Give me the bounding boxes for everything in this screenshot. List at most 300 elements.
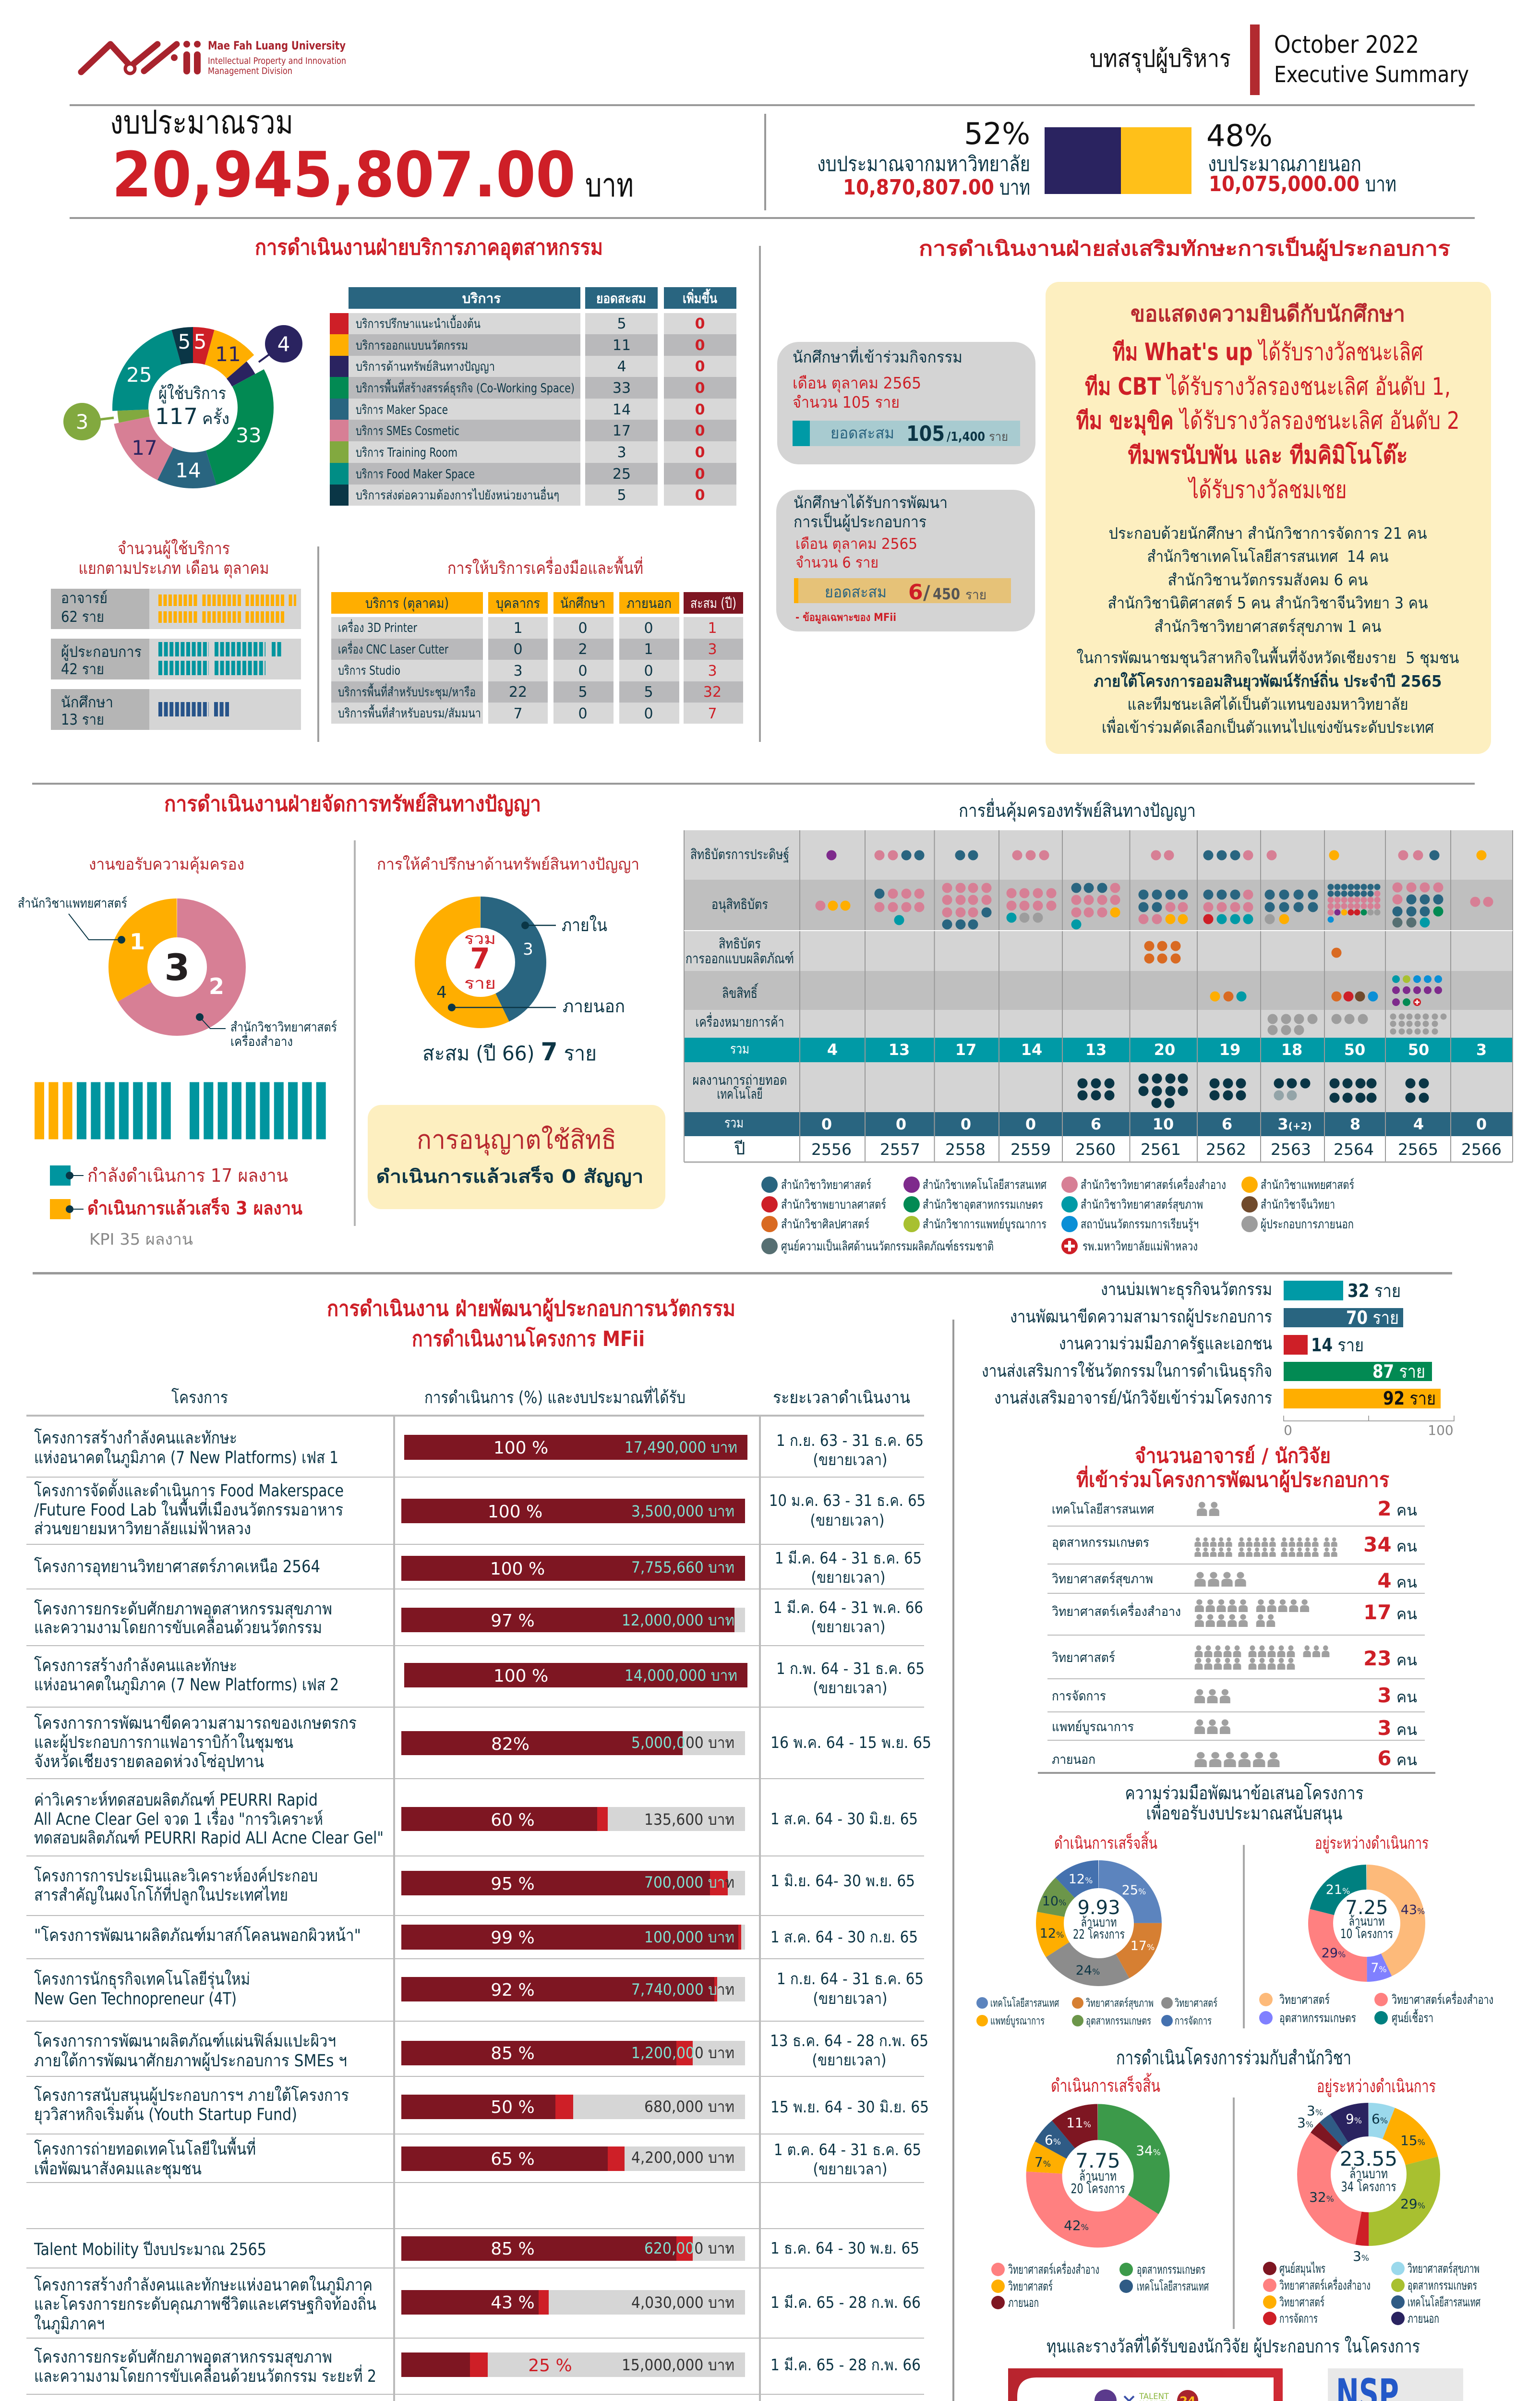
project row 2 [34,1478,926,1539]
table: tools and space: 32 [703,684,722,701]
project row 11: 13 ธ.ค. 64 - 28 ก.พ. 65 [770,2031,928,2050]
project row 16 [34,2347,921,2386]
panel: researchers pictogram: 4 คน [1377,1569,1417,1592]
total budget: 20,945,807.00 [112,138,576,211]
project row 5: 14,000,000 บาท [625,1666,737,1685]
donut: service users 117: 25 [126,363,152,387]
project row 6: และผู้ประกอบการกาแฟอาราบิก้าในชุมชน [34,1733,293,1752]
panel: congratulations callout: เพื่อเข้าร่วมคัดเลือกเป็นตัวแทนไปแข่งขันระดับประเทศ [1102,716,1434,737]
panel: IP works tick chart: KPI 35 ผลงาน [89,1230,193,1249]
table: tools and space: 0 [513,641,523,658]
table: services [330,287,736,506]
donut: proposals in progress 7.25: 7.25 [1345,1897,1388,1919]
donut: proposals completed 9.93: ดำเนินการเสร็จสิ้น [1054,1831,1157,1853]
panel: students in activities: 105 [906,422,945,446]
legend: faculties: สถาบันนวัตกรรมการเรียนรู้ฯ [1081,1217,1199,1232]
panel: IP works tick chart [35,1111,326,1249]
table: tools and space [331,556,743,724]
project row 2: 3,500,000 บาท [631,1502,734,1520]
project row 6: 16 พ.ค. 64 - 15 พ.ย. 65 [770,1733,931,1752]
table: tools and space: สะสม (ปี) [690,595,736,611]
donut: joint completed 7.75: วิทยาศาสตร์ [1008,2280,1053,2294]
table: services: 11 [613,337,631,354]
project row 6: โครงการการพัฒนาขีดความสามารถของเกษตรกร [34,1713,357,1733]
panel: IP protection requests donut: สำนักวิชาวิทยาศาสตร์ [230,1019,337,1035]
donut: joint completed 7.75 [991,2073,1209,2310]
donut: joint in progress 23.55: 32% [1309,2189,1334,2205]
donut: joint completed 7.75: 7.75 [1075,2149,1120,2172]
donut: proposals completed 9.93 [976,1831,1217,2027]
table: services: บริการ Food Maker Space [356,467,475,482]
panel: congratulations callout: สำนักวิชาเทคโนโลยีสารสนเทศ 14 คน [1147,547,1388,566]
table: services: 0 [695,444,705,461]
heading: grants and awards: ทุนและรางวัลที่ได้รับของนักวิจัย ผู้ประกอบการ ในโครงการ [1047,2334,1420,2357]
table: services: 0 [695,423,705,439]
project row 9: 99 % [491,1928,535,1948]
heading: proposal cooperation: ความร่วมมือพัฒนาข้อเสนอโครงการ [1125,1783,1363,1804]
donut: proposals completed 9.93: อุตสาหกรรมเกษตร [1086,2015,1151,2027]
panel: congratulations callout: ทีม ขะมุขิค ได้รับรางวัลรองชนะเลิศ อันดับ 2 [1076,407,1459,436]
project row 4: 97 % [491,1611,535,1631]
table: IP filings matrix: 2558 [945,1140,986,1159]
table: IP filings matrix: 6 [1222,1115,1232,1133]
donut: joint in progress 23.55: วิทยาศาสตร์เครื่องสำอาง [1279,2277,1371,2293]
donut: service users 117: 3 [76,410,88,434]
table: IP filings matrix: 3(+2) [1277,1115,1312,1133]
table: IP filings matrix: 4 [827,1041,838,1059]
bar chart: companies by work area: 0 [1284,1422,1292,1438]
panel: IP consulting donut: 3 [523,940,533,959]
bar chart: companies by work area: งานบ่มเพาะธุรกิจนวัตกรรม [1101,1280,1272,1300]
project row 10: 7,740,000 บาท [631,1980,734,1999]
table: tools and space: 3 [513,663,523,679]
budget split: งบประมาณภายนอก [1208,152,1361,176]
project row 11 [34,2031,928,2071]
donut: joint in progress 23.55: 23.55 [1340,2147,1397,2171]
table: IP filings matrix: 2556 [811,1140,852,1159]
panel: IP protection requests donut: เครื่องสำอาง [230,1032,293,1049]
project row 6: 82% [491,1734,529,1754]
bar chart: companies by work area: 100 [1428,1422,1454,1438]
project row 4: (ขยายเวลา) [811,1617,885,1636]
donut: joint completed 7.75: 6% [1045,2132,1061,2148]
panel: researchers pictogram [1038,1444,1435,1774]
table: services: 0 [695,401,705,418]
budget split [817,116,1396,200]
project row 6: จังหวัดเชียงรายตลอดห่วงโซ่อุปทาน [34,1752,264,1771]
table: IP filings matrix: 17 [955,1041,976,1059]
table: tools and space: 7 [708,705,717,722]
table: tools and space: 0 [644,705,653,722]
table: tools and space: ภายนอก [626,595,672,611]
table: services: 4 [617,358,626,375]
project row 10: 1 ก.ย. 64 - 31 ธ.ค. 65 [777,1969,924,1988]
table: IP filings matrix: อนุสิทธิบัตร [711,896,768,913]
donut: joint in progress 23.55 [1263,2076,1480,2326]
project row 15: โครงการสร้างกำลังคนและทักษะแห่งอนาคตในภูมิภาค [34,2275,373,2295]
project row 4: โครงการยกระดับศักยภาพอุตสาหกรรมสุขภาพ [34,1599,332,1619]
project row 2: โครงการจัดตั้งและดำเนินการ Food Makerspace [34,1478,344,1501]
panel: IP protection requests donut: 2 [209,973,224,999]
legend: faculties: สำนักวิชาศิลปศาสตร์ [781,1217,869,1232]
project row 5: 1 ก.พ. 64 - 31 ธ.ค. 65 [776,1659,925,1678]
heading: innovation entrepreneurs [327,1297,735,1351]
table: tools and space: 7 [513,705,523,722]
donut: joint in progress 23.55: 3% [1297,2115,1313,2131]
heading: industry services: การดำเนินงานฝ่ายบริการภาคอุตสาหกรรม [255,235,603,261]
project row 13 [34,2136,921,2179]
table: IP filings matrix: สิทธิบัตรการประดิษฐ์ [690,846,789,863]
table: IP filings matrix: 2557 [880,1140,920,1159]
donut: proposals in progress 7.25: ล้านบาท [1349,1914,1384,1929]
project row 14 [34,2236,919,2261]
header logo: MFii: Management Division [208,66,292,76]
donut: joint completed 7.75: วิทยาศาสตร์เครื่องสำอาง [1008,2261,1099,2277]
budget split: 10,870,807.00 [843,175,994,200]
donut: proposals completed 9.93: 12% [1040,1926,1064,1941]
budget split: 48% [1206,118,1273,153]
project row 15 [34,2275,921,2334]
project row 10: โครงการนักธุรกิจเทคโนโลยีรุ่นใหม่ [34,1969,250,1989]
legend: faculties: สำนักวิชาพยาบาลศาสตร์ [781,1198,886,1212]
donut: service users 117: 17 [132,436,157,460]
donut: joint completed 7.75: 7% [1035,2154,1051,2170]
table: services: บริการส่งต่อความต้องการไปยังหน่วยงานอื่นๆ [356,486,559,503]
header title: Executive Summary [1274,61,1469,87]
table: IP filings matrix: 50 [1344,1041,1365,1059]
panel: researchers pictogram: ภายนอก [1052,1752,1095,1767]
budget split: บาท [1365,172,1396,196]
donut: proposals completed 9.93: วิทยาศาสตร์ [1175,1997,1217,2010]
table header: projects: โครงการ [171,1388,228,1407]
table: tools and space: บริการพื้นที่สำหรับประชุม/หารือ [338,683,476,700]
bar chart: companies by work area: 92 ราย [1383,1388,1436,1409]
donut: service users 117: 14 [175,459,201,482]
bar chart: companies by work area: งานส่งเสริมอาจารย์/นักวิจัยเข้าร่วมโครงการ [994,1388,1272,1408]
donut: service users 117 [63,325,302,482]
panel: researchers pictogram: 2 คน [1377,1497,1417,1520]
project row 16: และความงามโดยการขับเคลื่อนด้วยนวัตกรรม ระยะที่ 2 [34,2365,376,2386]
donut: joint completed 7.75: ดำเนินการเสร็จสิ้น [1051,2073,1160,2096]
table: tools and space: 0 [578,705,588,722]
panel: congratulations callout: ประกอบด้วยนักศึกษา สำนักวิชาการจัดการ 21 คน [1109,524,1427,543]
panel: users by type: ผู้ประกอบการ [61,643,142,661]
donut: service users 117: 33 [236,424,262,447]
project row 12: 15 พ.ย. 64 - 30 มิ.ย. 65 [770,2098,929,2116]
panel: congratulations callout: ได้รับรางวัลชมเชย [1187,476,1347,504]
donut: proposals in progress 7.25: ศูนย์เชื้อรา [1392,2009,1433,2025]
project row 2: 100 % [488,1502,542,1522]
header logo: MFii: Intellectual Property and Innovation [208,56,346,66]
project row 1: 17,490,000 บาท [625,1438,737,1456]
table: tools and space: บุคลากร [496,595,540,612]
legend: faculties: ศูนย์ความเป็นเลิศด้านนวัตกรรมผลิตภัณฑ์ธรรมชาติ [781,1238,994,1254]
table: services: 25 [613,466,631,483]
panel: congratulations callout: สำนักวิชานวัตกรรมสังคม 6 คน [1167,570,1368,589]
heading: IP management: การดำเนินงานฝ่ายจัดการทรัพย์สินทางปัญญา [164,792,541,816]
table: IP filings matrix: 0 [896,1115,906,1133]
panel: researchers pictogram: อุตสาหกรรมเกษตร [1052,1535,1149,1551]
legend: faculties: รพ.มหาวิทยาลัยแม่ฟ้าหลวง [1083,1239,1198,1254]
donut: joint in progress 23.55: เทคโนโลยีสารสนเทศ [1408,2295,1480,2310]
donut: joint in progress 23.55: 3% [1353,2248,1369,2264]
donut: proposals completed 9.93: 22 โครงการ [1073,1927,1125,1942]
panel: IP consulting donut: การให้คำปรึกษาด้านทรัพย์สินทางปัญญา [377,855,639,873]
project row 16: โครงการยกระดับศักยภาพอุตสาหกรรมสุขภาพ [34,2347,332,2367]
project row 8: โครงการการประเมินและวิเคราะห์องค์ประกอบ [34,1866,318,1886]
donut: joint in progress 23.55: ศูนย์สมุนไพร [1279,2261,1325,2276]
table: services: 0 [695,466,705,483]
donut: joint in progress 23.55: ภายนอก [1408,2312,1439,2326]
panel: IP protection requests donut: 1 [130,929,145,955]
table: tools and space: 0 [644,620,653,637]
donut: joint in progress 23.55: 29% [1400,2196,1425,2212]
donut: joint completed 7.75: ภายนอก [1008,2296,1039,2310]
project row 2: (ขยายเวลา) [810,1511,884,1529]
legend: faculties: สำนักวิชาอุตสาหกรรมเกษตร [923,1198,1043,1212]
donut: proposals in progress 7.25: 43% [1401,1903,1425,1917]
project row 6 [34,1713,931,1771]
project row 15: 43 % [491,2293,535,2313]
project row 2: /Future Food Lab ในพื้นที่เมืองนวัตกรรมอาหาร [34,1497,343,1520]
table: services: 0 [695,315,705,332]
table: tools and space: 1 [644,641,653,658]
table: IP filings matrix: 3 [1476,1041,1487,1059]
project row 16: 15,000,000 บาท [622,2356,734,2374]
panel: IP consulting donut: สะสม (ปี 66) 7 ราย [422,1038,597,1067]
project row 15: ในภูมิภาคฯ [34,2314,105,2334]
donut: joint completed 7.75: 11% [1066,2115,1091,2131]
budget split: 52% [964,116,1030,151]
panel: researchers pictogram: จำนวนอาจารย์ / นักวิจัย [1135,1444,1331,1467]
project row 1: 1 ก.ย. 63 - 31 ธ.ค. 65 [776,1431,924,1450]
table: IP filings matrix: 20 [1154,1041,1175,1059]
panel: congratulations callout: สำนักวิชาวิทยาศาสตร์สุขภาพ 1 คน [1154,617,1382,636]
project row 12: 680,000 บาท [644,2098,734,2116]
panel: researchers pictogram: ที่เข้าร่วมโครงการพัฒนาผู้ประกอบการ [1076,1466,1389,1492]
bar chart: companies by work area: งานพัฒนาขีดความสามารถผู้ประกอบการ [1010,1307,1272,1327]
table header: projects: การดำเนินการ (%) และงบประมาณที่ได้รับ [424,1386,686,1407]
panel: students in activities: นักศึกษาที่เข้าร่วมกิจกรรม [793,346,962,366]
legend: faculties: สำนักวิชาเทคโนโลยีสารสนเทศ [923,1177,1047,1192]
project row 5: 100 % [493,1666,548,1686]
table header: projects: ระยะเวลาดำเนินงาน [773,1388,910,1407]
panel: students developed: การเป็นผู้ประกอบการ [794,512,926,532]
panel: IP protection requests donut: 3 [165,946,190,989]
project row 9: 1 ส.ค. 64 - 30 ก.ย. 65 [770,1928,918,1946]
table: IP filings matrix: 2561 [1141,1140,1181,1159]
panel: congratulations callout: ขอแสดงความยินดีกับนักศึกษา [1131,301,1405,327]
callout: licensing [368,1105,665,1209]
legend: faculties: สำนักวิชาวิทยาศาสตร์ [781,1178,871,1192]
table: IP filings matrix: เครื่องหมายการค้า [695,1012,784,1030]
project row 12: โครงการสนับสนุนผู้ประกอบการฯ ภายใต้โครงการ [34,2086,349,2105]
project row 13: 4,200,000 บาท [631,2148,734,2167]
panel: researchers pictogram: 3 คน [1377,1716,1417,1740]
project row 7: ค่าวิเคราะห์ทดสอบผลิตภัณฑ์ PEURRI Rapid [34,1791,318,1810]
table: services: ยอดสะสม [596,291,646,306]
table: IP filings matrix: 2563 [1271,1140,1311,1159]
donut: service users 117: ผู้ใช้บริการ [158,384,226,403]
project row 12 [34,2086,929,2124]
table: IP filings matrix: ลิขสิทธิ์ [722,983,758,1001]
table: tools and space: เครื่อง CNC Laser Cutter [338,641,448,657]
project row 11: ภายใต้การพัฒนาศักยภาพผู้ประกอบการ SMEs ฯ [34,2051,347,2071]
budget split: บาท [999,176,1030,200]
donut: proposals completed 9.93: 10% [1042,1894,1066,1909]
table: services: 5 [617,487,626,504]
header title: October 2022 [1274,31,1419,59]
panel: users by type: 62 ราย [61,608,104,626]
project row 2: 10 ม.ค. 63 - 31 ธ.ค. 65 [769,1491,926,1510]
panel: students developed: ยอดสะสม [825,582,887,601]
project row 3: 7,755,660 บาท [631,1558,734,1576]
project row 14: Talent Mobility ปีงบประมาณ 2565 [34,2240,266,2259]
legend: faculties [761,1176,1354,1254]
table: IP filings matrix: 0 [1025,1115,1036,1133]
callout: licensing: การอนุญาตใช้สิทธิ [417,1125,616,1156]
project row 7 [34,1791,918,1848]
panel: users by type: นักศึกษา [61,694,113,711]
project row 1: (ขยายเวลา) [813,1450,887,1469]
panel: researchers pictogram: วิทยาศาสตร์เครื่องสำอาง [1052,1602,1181,1619]
donut: joint in progress 23.55: อุตสาหกรรมเกษตร [1408,2279,1477,2293]
table: IP filings matrix: รวม [724,1115,744,1131]
donut: joint in progress 23.55: การจัดการ [1279,2312,1318,2326]
project row 8: 1 มิ.ย. 64- 30 พ.ย. 65 [770,1871,915,1890]
heading: proposal cooperation: เพื่อขอรับงบประมาณสนับสนุน [1146,1801,1343,1824]
panel: IP protection requests donut [18,855,337,1049]
donut: joint in progress 23.55: 3% [1307,2103,1323,2119]
panel: users by type: 42 ราย [61,661,104,678]
project row 14: 1 ธ.ค. 64 - 30 พ.ย. 65 [770,2239,919,2257]
donut: service users 117: 4 [277,332,290,356]
table: IP filings matrix: รวม [730,1041,749,1057]
project row 7: 135,600 บาท [644,1810,734,1829]
project row 5: แห่งอนาคตในภูมิภาค (7 New Platforms) เฟส 2 [34,1675,339,1695]
donut: joint completed 7.75: 42% [1064,2218,1089,2233]
project row 3: 100 % [490,1559,545,1579]
panel: students in activities: เดือน ตุลาคม 2565 [793,374,921,393]
table: services: 17 [613,423,631,439]
table: IP filings matrix: 2565 [1398,1140,1438,1159]
table: tools and space: บริการ (ตุลาคม) [365,595,449,612]
heading: joint projects with schools: การดำเนินโครงการร่วมกับสำนักวิชา [1116,2047,1351,2069]
panel: students in activities: /1,400 [947,430,985,444]
table: services: บริการปรึกษาแนะนำเบื้องต้น [356,315,481,331]
donut: proposals completed 9.93: 9.93 [1077,1897,1120,1919]
panel: students developed: จำนวน 6 ราย [795,554,878,571]
panel: students developed [776,490,1035,631]
donut: proposals in progress 7.25: อยู่ระหว่างดำเนินการ [1315,1834,1429,1853]
donut: service users 117: 11 [215,342,241,366]
table: IP filings matrix: 2566 [1461,1140,1502,1159]
donut: joint in progress 23.55: 34 โครงการ [1341,2179,1396,2195]
project row 3: (ขยายเวลา) [811,1568,885,1587]
donut: service users 117: 5 [194,330,206,353]
table: services: 3 [617,444,626,461]
panel: students developed: ราย [965,587,987,603]
total budget: งบประมาณรวม [110,104,293,142]
bar chart: companies by work area [982,1280,1454,1438]
panel: researchers pictogram: 17 คน [1363,1601,1417,1624]
donut: joint completed 7.75: อุตสาหกรรมเกษตร [1137,2263,1205,2277]
panel: congratulations callout: สำนักวิชานิติศาสตร์ 5 คน สำนักวิชาจีนวิทยา 3 คน [1108,594,1428,612]
table: services: บริการพื้นที่สร้างสรรค์ธุรกิจ (Co-Working Space) [356,379,575,396]
table: tools and space: 0 [644,663,653,679]
budget split: 10,075,000.00 [1209,172,1360,196]
table header: projects [171,1386,910,1407]
panel: users by type: 13 ราย [61,711,104,728]
panel: IP consulting donut: 4 [436,983,447,1002]
project row 8: 95 % [491,1874,535,1894]
table: tools and space: 3 [708,641,717,658]
panel: users by type: แยกตามประเภท เดือน ตุลาคม [79,559,269,578]
table: IP filings matrix: 2564 [1334,1140,1374,1159]
panel: users by type: จำนวนผู้ใช้บริการ [118,539,230,558]
donut: proposals in progress 7.25: 10 โครงการ [1340,1927,1393,1941]
table: IP filings matrix: 0 [821,1115,832,1133]
table: services: บริการ [462,291,501,306]
donut: proposals in progress 7.25: 21% [1326,1882,1350,1897]
table: services: บริการ SMEs Cosmetic [356,424,459,438]
table: tools and space: 3 [708,663,717,679]
table: services: 0 [695,337,705,354]
header title: บทสรุปผู้บริหาร [1090,45,1231,73]
table: tools and space: 1 [708,620,717,637]
legend: faculties: สำนักวิชาจีนวิทยา [1261,1198,1335,1212]
table: tools and space: 5 [578,684,588,701]
bar chart: companies by work area: 87 ราย [1372,1361,1425,1382]
legend: faculties: สำนักวิชาวิทยาศาสตร์สุขภาพ [1081,1198,1203,1212]
panel: congratulations callout: ทีม CBT ได้รับรางวัลรองชนะเลิศ อันดับ 1, [1085,373,1451,400]
legend: faculties: ผู้ประกอบการภายนอก [1261,1217,1354,1232]
project row 11: 1,200,000 บาท [631,2044,734,2062]
table: tools and space: 5 [644,684,653,701]
project row 3 [34,1549,922,1587]
panel: users by type: อาจารย์ [61,590,108,607]
donut: proposals in progress 7.25: วิทยาศาสตร์ [1279,1993,1330,2007]
table: tools and space: 1 [513,620,523,637]
panel: students in activities: จำนวน 105 ราย [793,393,900,412]
donut: joint in progress 23.55: วิทยาศาสตร์สุขภาพ [1408,2262,1480,2276]
donut: joint completed 7.75: 20 โครงการ [1071,2181,1125,2196]
project row 11: โครงการการพัฒนาผลิตภัณฑ์แผ่นฟิล์มแปะผิวฯ [34,2031,336,2051]
table: IP filings matrix: 14 [1021,1041,1042,1059]
project row 15: 4,030,000 บาท [631,2293,734,2312]
panel: IP consulting donut: รวม [464,929,496,948]
header logo: MFii: Mae Fah Luang University [208,39,346,52]
panel: congratulations callout: ทีม What's up ได้รับรางวัลชนะเลิศ [1113,338,1423,366]
panel: IP consulting donut: ภายนอก [563,996,625,1017]
project row 8 [34,1866,915,1905]
table: services: 33 [613,380,631,397]
bar chart: companies by work area: 32 ราย [1348,1280,1401,1301]
donut: proposals completed 9.93: วิทยาศาสตร์สุขภาพ [1086,1997,1154,2010]
callout: licensing: ดำเนินการแล้วเสร็จ 0 สัญญา [376,1165,643,1187]
table: IP filings matrix: 19 [1219,1041,1240,1059]
project row 15: และโครงการยกระดับคุณภาพชีวิตและเศรษฐกิจท้องถิ่น [34,2292,376,2314]
table: services: 0 [695,380,705,397]
donut: joint completed 7.75: 34% [1136,2143,1161,2158]
donut: service users 117: 117 [155,403,198,429]
bar chart: companies by work area: 14 ราย [1311,1334,1364,1356]
project row 10 [34,1969,924,2009]
panel: IP consulting donut [377,855,639,1067]
donut: proposals in progress 7.25: 29% [1322,1946,1346,1961]
table: tools and space: 0 [578,663,588,679]
table: tools and space: 2 [578,641,588,658]
